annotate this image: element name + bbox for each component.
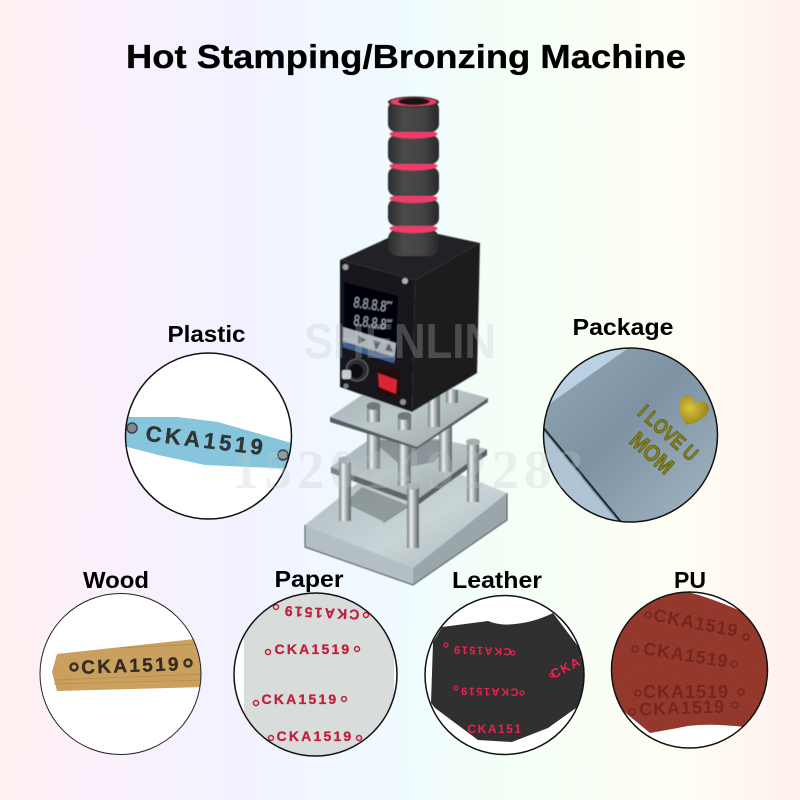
sample: paper photo: CKA1519 <box>275 641 351 657</box>
sample: wood photo: CKA1519 <box>81 654 181 679</box>
sample: package photo: MOM <box>625 427 679 479</box>
circle outline: paper <box>234 593 397 756</box>
sample: PU photo <box>612 592 767 747</box>
screws <box>342 264 408 405</box>
panel: wood <box>40 567 205 754</box>
panel: package <box>540 314 722 527</box>
temperature knob <box>342 359 368 381</box>
circle outline: plastic <box>126 353 292 519</box>
temperature display: 8.8.8.8 <box>352 294 387 316</box>
temperature display: SV <box>387 318 393 323</box>
sample: leather photo: CKA1519 <box>452 643 512 657</box>
label: leather: Leather <box>452 567 542 593</box>
inner guide rods <box>367 420 452 486</box>
sample: paper photo <box>234 590 397 760</box>
temperature display <box>344 282 398 344</box>
foam handle <box>388 96 439 256</box>
red power switch <box>378 369 400 396</box>
watermark: SHENLIN <box>304 315 496 369</box>
sample: paper photo: CKA1519 <box>277 728 353 744</box>
control box <box>340 234 480 412</box>
sample: plastic photo <box>120 353 295 519</box>
control panel keys <box>343 327 396 363</box>
sample: leather photo: CKA151 <box>467 722 523 736</box>
watermark: 15201492283 <box>232 439 584 500</box>
label: paper: Paper <box>274 566 344 592</box>
circle outline: wood <box>40 594 201 754</box>
label: wood: Wood <box>83 567 149 593</box>
sample: PU photo: CKA1519 <box>643 682 729 702</box>
sample: package photo: I LOVE U <box>633 401 702 466</box>
label: plastic: Plastic <box>168 321 246 347</box>
label: package: Package <box>572 314 674 340</box>
title: Hot Stamping/Bronzing Machine <box>126 38 686 75</box>
sample: wood photo <box>40 594 205 754</box>
circle outline: package <box>544 348 718 522</box>
upper plate <box>330 372 488 449</box>
panel: paper <box>234 566 397 760</box>
sample: PU photo: CKA1519 <box>639 697 725 719</box>
circle outline: PU <box>612 592 768 748</box>
sample: leather photo: CKA1519 <box>460 684 519 698</box>
temperature display: PV <box>387 300 393 305</box>
machine base block <box>305 450 507 585</box>
sample: package photo <box>540 345 722 527</box>
panel: leather <box>425 567 592 754</box>
lower plate <box>331 428 487 505</box>
panel: plastic <box>120 321 295 519</box>
front guide rods <box>338 438 480 548</box>
circle outline: leather <box>425 596 584 754</box>
sample: leather photo <box>425 596 592 754</box>
machine illustration <box>305 96 507 585</box>
sample: leather photo: CKA1 <box>548 649 592 682</box>
label: PU: PU <box>674 567 706 593</box>
sample: PU photo: CKA1519 <box>642 638 730 672</box>
panel: PU <box>605 567 775 748</box>
sample: PU photo: CKA1519 <box>652 605 740 641</box>
sample: plastic photo: CKA1519 <box>144 421 268 460</box>
sample: paper photo: CKA1519 <box>282 603 360 623</box>
sample: paper photo: CKA1519 <box>262 691 338 707</box>
watermark <box>232 315 584 500</box>
temperature display: 8.8.8.8 <box>352 312 387 334</box>
